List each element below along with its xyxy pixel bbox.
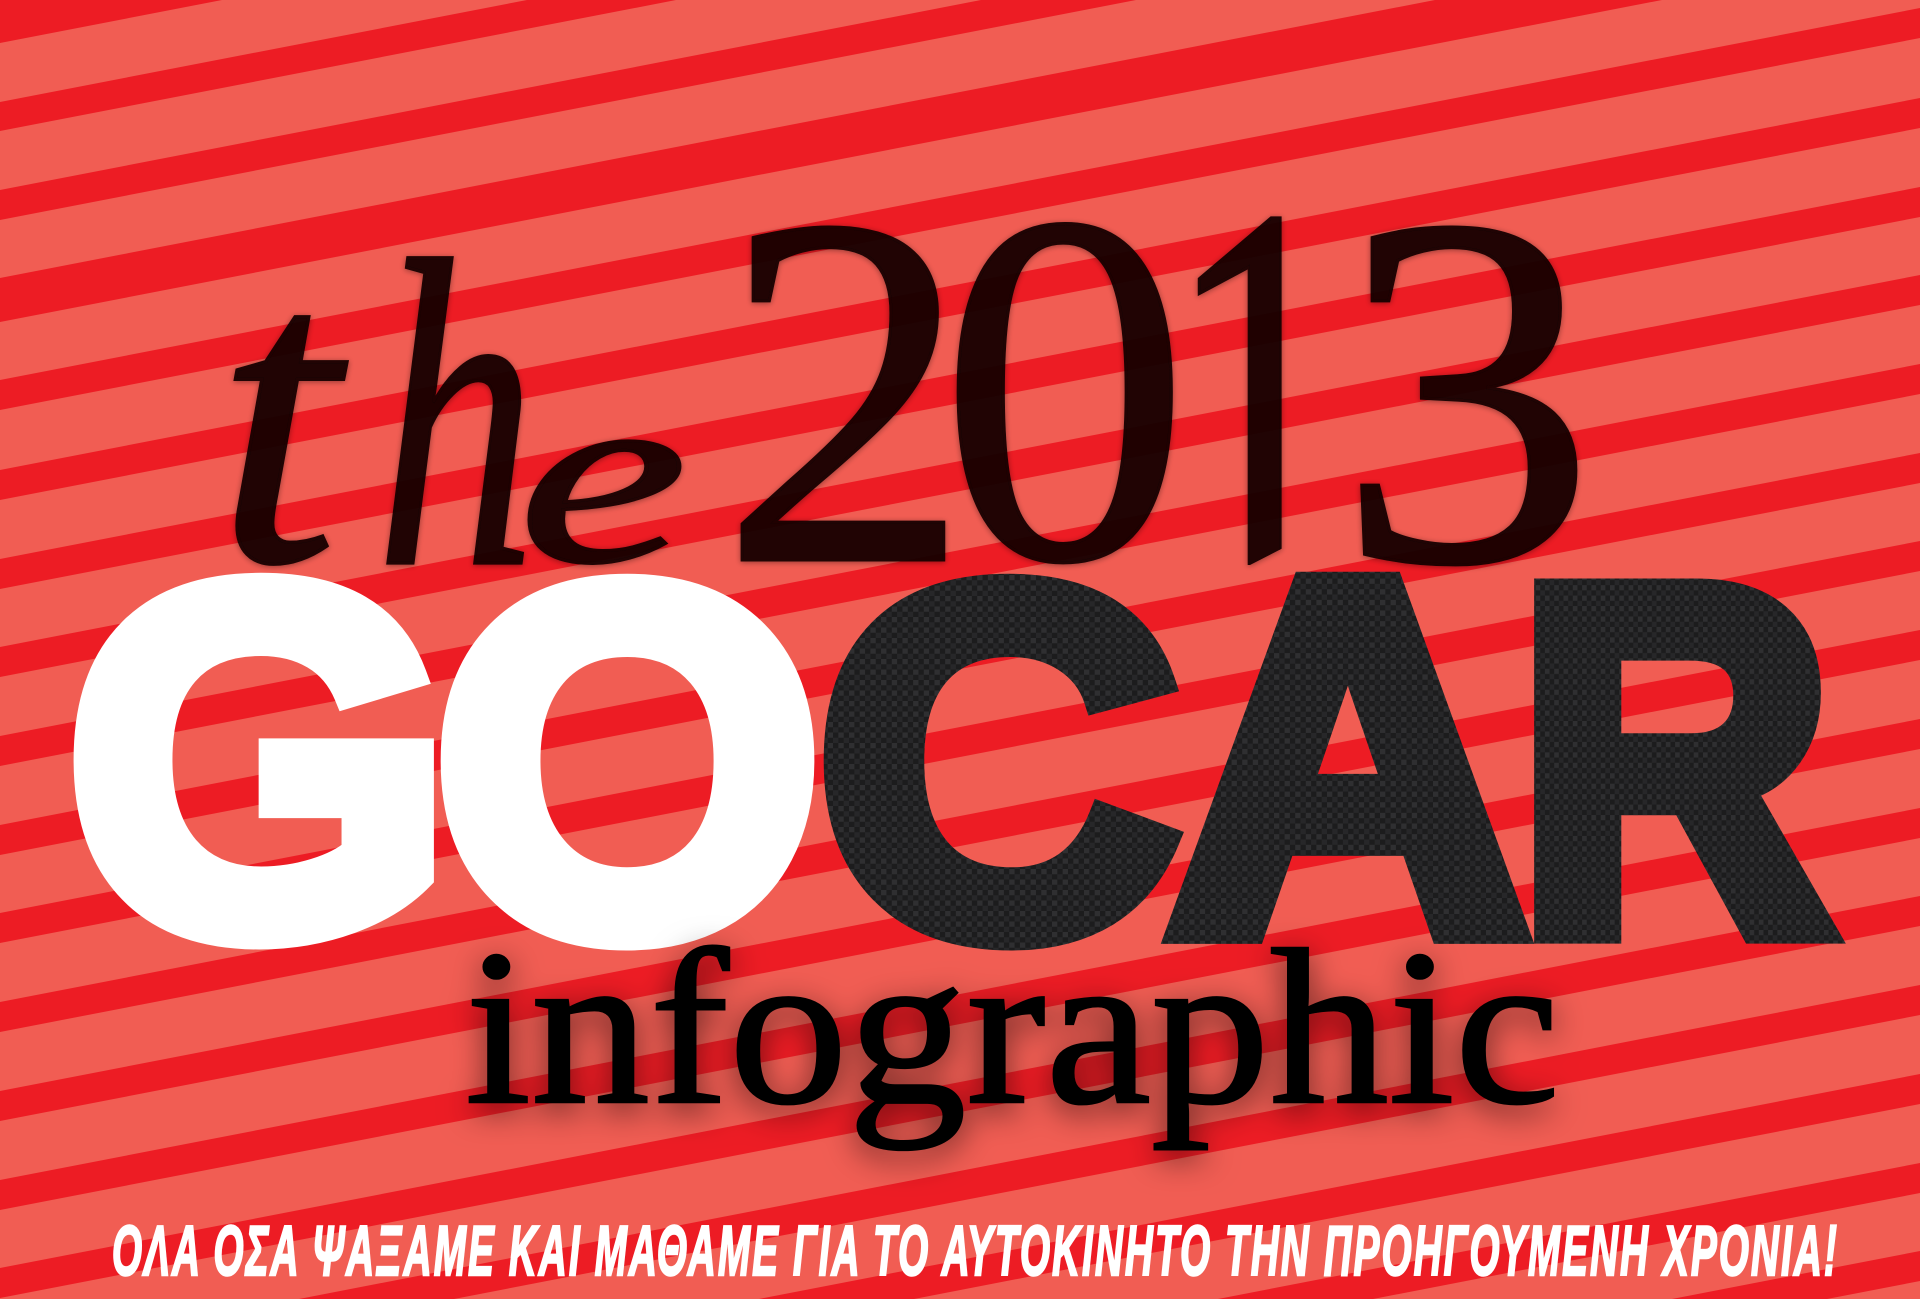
script word: the: [216, 172, 688, 659]
title: GO: [67, 484, 822, 1037]
title: infographic: infographic: [465, 905, 1560, 1151]
year: 2013: 3: [1337, 113, 1596, 669]
year: 2013: 1: [1165, 88, 1354, 712]
script word: the: e: [518, 334, 688, 617]
title: the 2013: [230, 214, 1581, 571]
script word: the: t: [216, 176, 353, 654]
title: CAR: R: [1517, 485, 1833, 1035]
title: GO: G: [67, 484, 451, 1036]
title: CAR: [817, 477, 1833, 1037]
title: GO: O: [434, 486, 822, 1037]
year: 2013: [737, 214, 1581, 571]
year: 2013: 2: [720, 112, 972, 669]
title: CAR: C: [817, 486, 1179, 1037]
year: 2013: 0: [939, 110, 1190, 667]
script word: the: h: [376, 172, 536, 659]
title: CAR: A: [1168, 477, 1528, 1036]
